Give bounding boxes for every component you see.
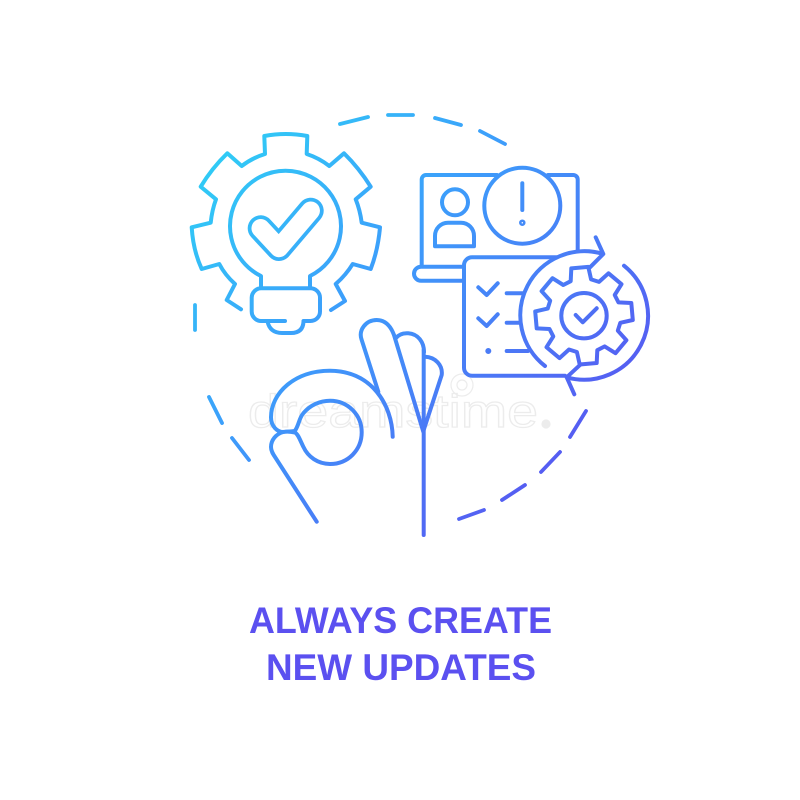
- cycle arrow two: [567, 266, 648, 394]
- alert circle: [484, 168, 560, 244]
- laptop screen: [422, 175, 578, 265]
- index finger outer curve: [271, 371, 393, 522]
- list lines: [507, 293, 528, 351]
- icon: checklist with rotating gear: [464, 237, 648, 394]
- exclamation dot: [520, 221, 524, 225]
- title: [249, 600, 552, 688]
- exclamation mark: [520, 183, 524, 210]
- wrist line: [422, 350, 426, 535]
- check mark: [261, 211, 311, 248]
- small gear: [535, 267, 633, 364]
- watermark: [248, 374, 550, 437]
- pinky finger: [424, 357, 442, 430]
- title line two: NEW UPDATES: [266, 647, 536, 688]
- ring finger: [396, 333, 424, 352]
- gear outline: [192, 134, 380, 310]
- checks: [478, 283, 498, 326]
- bulb glass: [230, 171, 341, 288]
- person head: [442, 189, 468, 215]
- middle finger: [361, 320, 423, 432]
- small gear hub: [561, 293, 607, 338]
- dashed circle: [195, 115, 586, 519]
- document: [464, 257, 565, 376]
- title line one: ALWAYS CREATE: [249, 600, 552, 641]
- bulb tip: [268, 322, 304, 333]
- small gear check: [576, 308, 597, 322]
- bullet dot: [487, 350, 490, 352]
- watermark: dreamstime: [248, 385, 538, 437]
- cycle arrow one: [520, 237, 603, 366]
- bulb base: [252, 288, 320, 321]
- icon: gear with light bulb: [192, 134, 380, 333]
- icon: OK hand gesture: [271, 320, 442, 535]
- person body: [435, 223, 474, 246]
- laptop base: [414, 267, 463, 281]
- icon: laptop with alert: [414, 168, 578, 281]
